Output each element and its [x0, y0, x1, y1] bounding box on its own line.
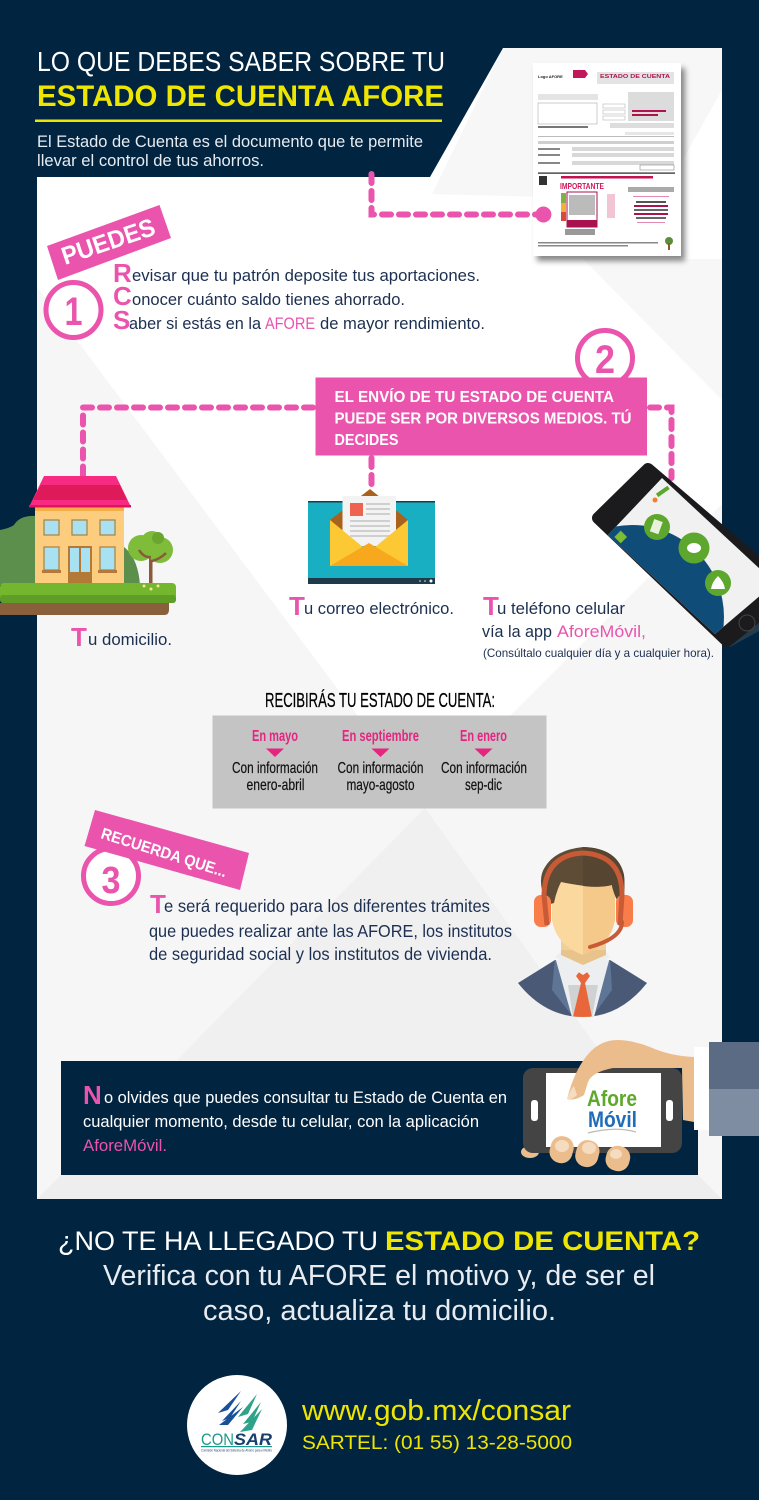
number badge 1: [46, 282, 101, 338]
ribbon: recuerda que: [84, 810, 249, 890]
callout: delivery heading: PUEDE SER POR DIVERSOS MEDIOS. TÚ: [334, 410, 632, 428]
number badge 1: 1: [64, 290, 82, 334]
text block: puedes list: onocer cuánto saldo tienes ahorrado.: [132, 290, 405, 309]
ribbon: recuerda que: RECUERDA QUE...: [99, 826, 229, 881]
panel: reminder banner: [61, 1061, 698, 1175]
app logo: [587, 1086, 637, 1133]
text block: puedes list: C: [113, 281, 132, 311]
contact details: SARTEL: (01 55) 13-28-5000: [302, 1433, 572, 1454]
column: enero: En enero: [460, 728, 507, 745]
column: mayo: En mayo: [252, 728, 298, 745]
column: septiembre: [338, 728, 424, 794]
title block: [35, 46, 445, 170]
statement document thumbnail: Logo AFORE: [538, 74, 563, 79]
column: enero: sep-dic: [465, 777, 502, 794]
text block: recuerda: que puedes realizar ante las AFORE, los institutos: [149, 921, 512, 941]
column: mayo: [232, 728, 318, 794]
icon: house: [0, 476, 176, 615]
column: mayo: Con información: [232, 760, 318, 777]
schedule heading: RECIBIRÁS TU ESTADO DE CUENTA:: [265, 689, 495, 712]
intro text: [37, 132, 423, 170]
text block: recuerda: T: [150, 889, 166, 919]
column: enero: [441, 728, 527, 794]
ribbon: puedes: PUEDES: [58, 213, 159, 271]
closing message: ¿NO TE HA LLEGADO TU: [58, 1226, 378, 1256]
panel: reminder banner: cualquier momento, desde tu celular, con la aplicación: [83, 1112, 479, 1131]
text block: puedes list: aber si estás en la: [129, 314, 262, 333]
intro text: llevar el control de tus ahorros.: [37, 151, 264, 170]
text block: puedes list: de mayor rendimiento.: [320, 314, 485, 333]
callout: delivery heading: [316, 378, 647, 456]
panel: reminder banner: AforeMóvil.: [83, 1136, 167, 1155]
logo: CONSAR: Comisión Nacional del Sistema de Ahorro para el Retiro: [201, 1448, 273, 1452]
closing message: [58, 1226, 700, 1327]
text: teléfono celular: vía la app: [482, 622, 552, 641]
callout: delivery heading: EL ENVÍO DE TU ESTADO DE CUENTA: [334, 389, 614, 406]
icon: smartphone: [592, 463, 759, 647]
panel: reminder banner: o olvides que puedes consultar tu Estado de Cuenta en: [104, 1088, 507, 1107]
closing message: caso, actualiza tu domicilio.: [203, 1295, 556, 1327]
callout: delivery heading: DECIDES: [334, 432, 398, 449]
statement document thumbnail: [533, 63, 685, 261]
text block: recuerda: [149, 889, 512, 964]
text: teléfono celular: T: [483, 591, 499, 621]
icon: hand holding phone: [521, 1040, 759, 1174]
text block: puedes list: [113, 258, 485, 335]
number badge 2: [578, 330, 632, 386]
text block: recuerda: de seguridad social y los institutos de vivienda.: [149, 944, 492, 964]
column: enero: Con información: [441, 760, 527, 777]
app logo: Afore: [587, 1086, 637, 1111]
text: teléfono celular: AforeMóvil,: [557, 622, 646, 641]
logo: CONSAR: CON: [201, 1430, 234, 1449]
column: septiembre: mayo-agosto: [346, 777, 415, 794]
contact details: www.gob.mx/consar: [301, 1395, 571, 1427]
text: correo electrónico: T: [289, 591, 305, 621]
closing message: ESTADO DE CUENTA?: [385, 1226, 700, 1256]
dashed connectors: delivery options: [83, 408, 672, 484]
logo: CONSAR: [187, 1375, 287, 1475]
text: domicilio: T: [71, 622, 87, 652]
text: correo electrónico: u correo electrónico.: [304, 599, 454, 618]
schedule panel: [212, 716, 546, 808]
text: domicilio: u domicilio.: [88, 630, 172, 649]
logo: CONSAR: SAR: [234, 1430, 273, 1449]
text block: puedes list: S: [113, 305, 130, 335]
ribbon: puedes: [47, 205, 171, 280]
statement document thumbnail: IMPORTANTE: [560, 181, 604, 191]
text block: puedes list: evisar que tu patrón deposite tus aportaciones.: [132, 266, 480, 285]
text: teléfono celular: (Consúltalo cualquier día y a cualquier hora).: [483, 646, 714, 660]
column: mayo: enero-abril: [246, 777, 304, 794]
text block: puedes list: R: [113, 258, 132, 288]
number badge 3: 3: [102, 860, 120, 902]
column: septiembre: En septiembre: [342, 728, 419, 745]
icon: call-centre agent: [518, 847, 647, 1017]
text: correo electrónico: [289, 591, 454, 621]
text block: recuerda: e será requerido para los diferentes trámites: [164, 896, 490, 916]
text: teléfono celular: u teléfono celular: [497, 599, 625, 618]
number badge 3: [84, 848, 138, 904]
title line 1: LO QUE DEBES SABER SOBRE TU: [37, 46, 445, 77]
icon: email envelope: [308, 489, 435, 584]
panel: main background: [37, 48, 722, 1199]
dashed connector: to document: [372, 174, 551, 222]
column: septiembre: Con información: [338, 760, 424, 777]
title line 2: ESTADO DE CUENTA AFORE: [37, 80, 444, 113]
panel: reminder banner: N: [83, 1080, 102, 1110]
app logo: Móvil: [588, 1107, 637, 1132]
intro text: El Estado de Cuenta es el documento que te permite: [37, 132, 423, 151]
text: domicilio: [71, 622, 172, 652]
contact details: [301, 1395, 572, 1454]
closing message: Verifica con tu AFORE el motivo y, de ser el: [103, 1260, 655, 1292]
number badge 2: 2: [595, 338, 615, 382]
text: teléfono celular: [482, 591, 714, 660]
text block: puedes list: AFORE: [265, 314, 315, 333]
statement document thumbnail: ESTADO DE CUENTA: [600, 74, 671, 80]
